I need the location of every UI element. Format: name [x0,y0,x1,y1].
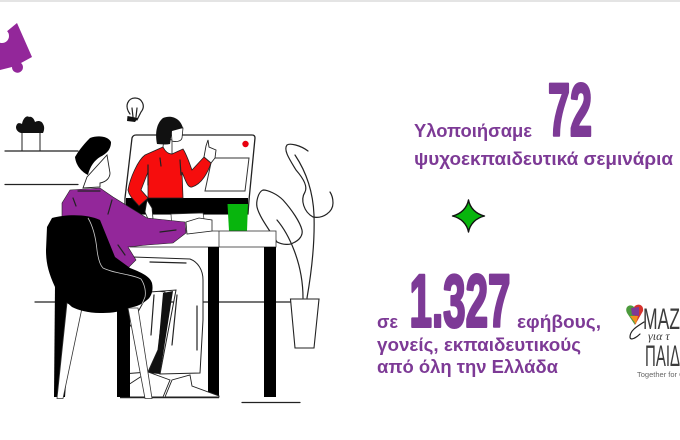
text: parents, teachers: γονείς, εκπαιδευτικούς [377,334,581,355]
man in purple sweater [62,136,212,268]
icon: purple puzzle piece [0,23,32,73]
plant with pot [257,144,333,348]
floor lines [35,302,300,402]
black chair [46,215,153,398]
text: implemented: Υλοποιήσαμε [414,121,532,141]
text: seminars statement [414,68,673,169]
text: adolescents: εφήβους, [517,311,601,332]
trousers and shoes [120,257,219,398]
icon: light bulb [127,98,143,122]
wall shelves with plant [5,116,78,184]
number: 72: 72 [548,68,592,152]
monitor [125,135,255,214]
icon: green four-point star [452,200,484,232]
text: to: σε [377,311,398,332]
text: gia to: για τ [648,329,670,343]
illustration: video call at a desk [5,98,333,402]
number: 1.327: 1.327 [410,260,510,342]
text: psychoeducational seminars: ψυχοεκπαιδευτικά σεμινάρια [414,149,673,169]
green cup [228,204,248,231]
papers on desk [171,213,206,231]
woman on screen in red sweater [128,117,216,219]
text: participants statement [377,260,601,377]
text: from all over Greece: από όλη την Ελλάδα [377,356,559,377]
icon: puzzle heart [626,305,643,325]
logo: Mazi gia to Paidi [626,303,680,379]
desk [130,231,276,397]
